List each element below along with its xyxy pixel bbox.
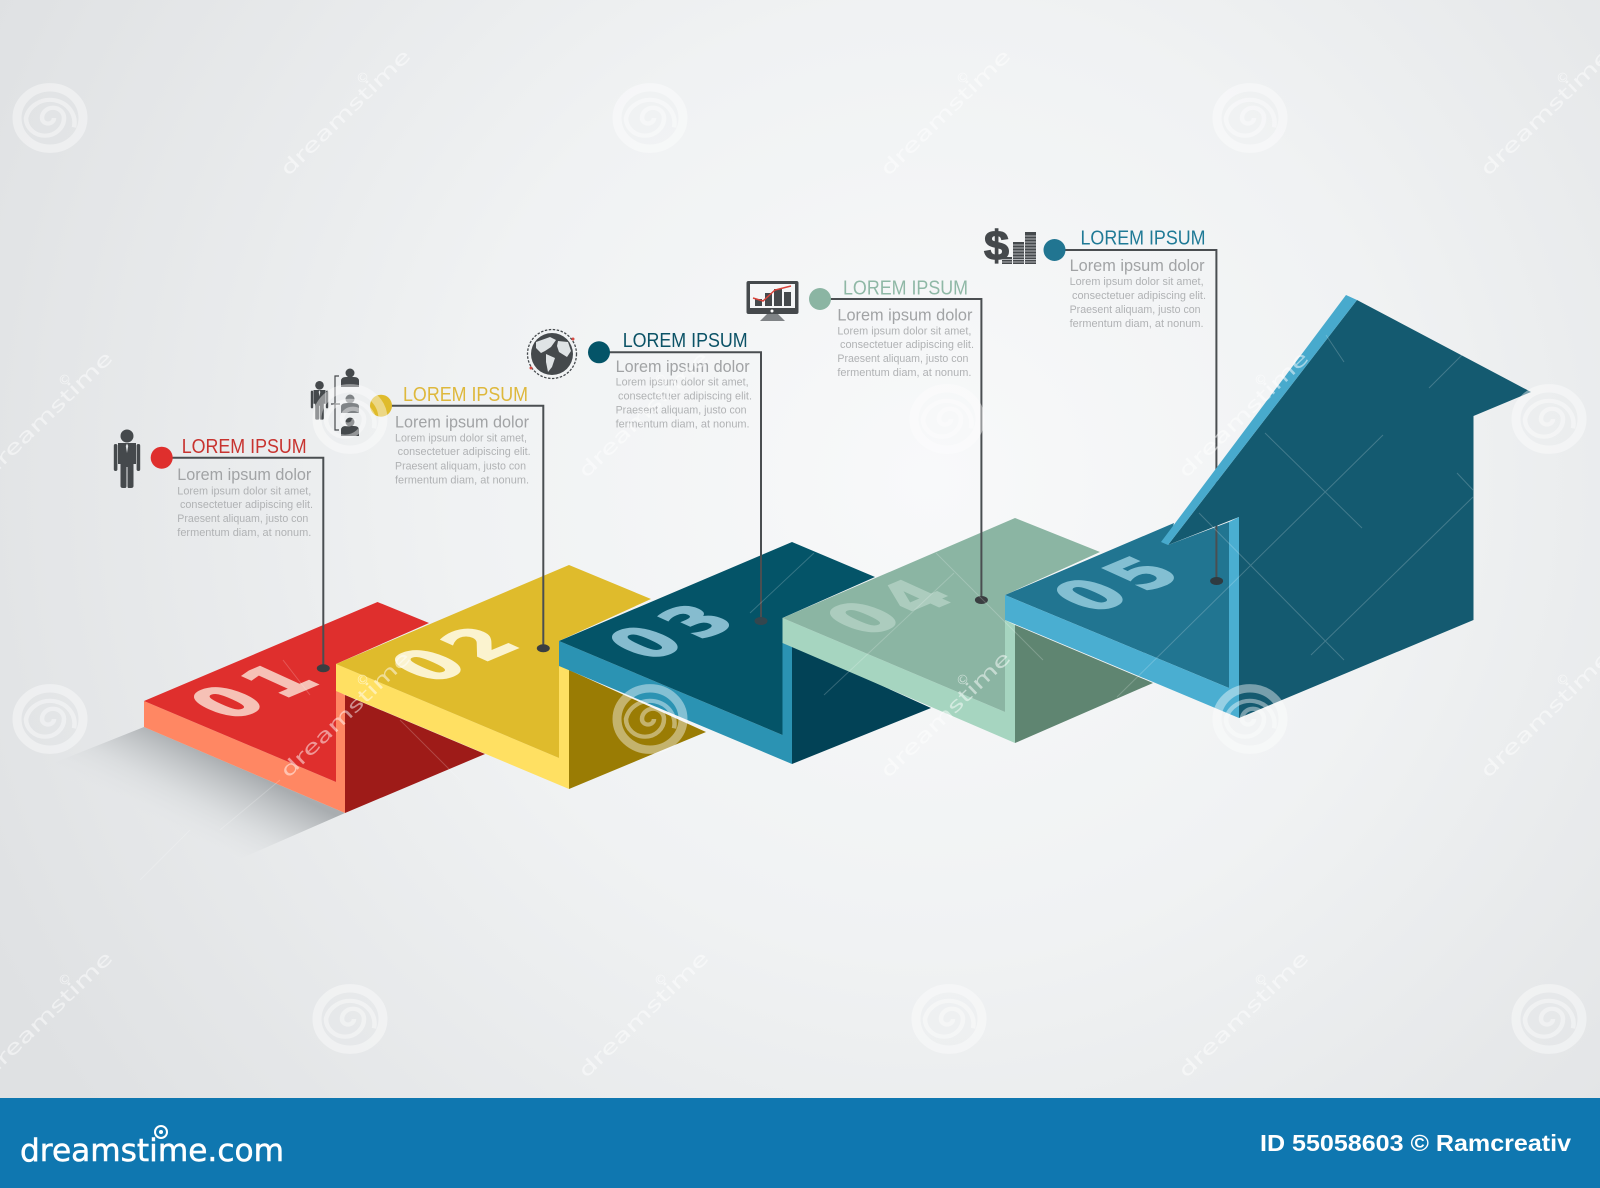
body 04 xyxy=(837,306,974,379)
body 03 xyxy=(616,357,752,430)
body 02: Lorem ipsum dolor sit amet, xyxy=(395,432,527,444)
body 01: Praesent aliquam, justo con xyxy=(177,513,308,525)
body 01: Lorem ipsum dolor sit amet, xyxy=(177,486,311,498)
watermark text: dreamstime xyxy=(1476,647,1600,782)
body 05: Praesent aliquam, justo con xyxy=(1070,304,1201,316)
watermark text: © xyxy=(1252,970,1271,990)
step 05 front face xyxy=(1005,517,1239,718)
icon: monitor with chart xyxy=(746,281,798,321)
big arrow xyxy=(1005,295,1531,718)
dot 03 xyxy=(588,341,610,363)
body 04: consectetuer adipiscing elit. xyxy=(840,339,974,351)
watermark text: dreamstime xyxy=(876,647,1015,782)
body 01: fermentum diam, at nonum. xyxy=(177,527,311,539)
footer logo: dreamstime.com xyxy=(20,1133,284,1169)
watermark text: © xyxy=(652,370,671,390)
body 02: Praesent aliquam, justo con xyxy=(395,460,526,472)
title 01: LOREM IPSUM xyxy=(182,435,307,458)
faint watermark cross lines xyxy=(140,335,1473,880)
icon: team hierarchy xyxy=(311,368,359,436)
body 05: fermentum diam, at nonum. xyxy=(1070,318,1204,330)
body 02: Lorem ipsum dolor xyxy=(395,412,529,431)
step 02 yellow xyxy=(336,565,706,789)
body 01 xyxy=(177,465,313,539)
item 02 xyxy=(370,383,531,486)
icon: dollar and bars xyxy=(984,222,1036,269)
body 03: fermentum diam, at nonum. xyxy=(616,418,750,430)
body 02: fermentum diam, at nonum. xyxy=(395,474,529,486)
leader line 05 xyxy=(1054,250,1223,585)
title 05: LOREM IPSUM xyxy=(1080,226,1206,249)
dot 01 xyxy=(151,447,173,469)
title 03: LOREM IPSUM xyxy=(623,329,748,352)
watermark text: © xyxy=(354,68,373,88)
icon: globe xyxy=(528,330,576,378)
watermark text: dreamstime xyxy=(876,45,1015,180)
step 04 sage xyxy=(782,518,1153,743)
body 03: consectetuer adipiscing elit. xyxy=(618,390,752,402)
body 05 xyxy=(1070,256,1206,330)
watermark text: © xyxy=(1252,370,1271,390)
arrow light edge xyxy=(1161,295,1357,545)
watermark text: © xyxy=(56,970,75,990)
item 05 xyxy=(1044,226,1206,330)
leader line 04 xyxy=(820,299,988,604)
title 02: LOREM IPSUM xyxy=(403,383,528,406)
body 04: Lorem ipsum dolor sit amet, xyxy=(837,326,971,338)
icon: businessman xyxy=(114,430,140,488)
dot 04 xyxy=(809,288,831,310)
body 02: consectetuer adipiscing elit. xyxy=(398,446,531,458)
icon: dollar and bars: $ xyxy=(984,222,1009,269)
watermark text: dreamstime xyxy=(1174,947,1313,1082)
body 01: consectetuer adipiscing elit. xyxy=(180,499,313,511)
body 03: Lorem ipsum dolor sit amet, xyxy=(616,376,749,388)
watermark spirals xyxy=(17,87,1582,1050)
watermark text: dreamstime xyxy=(276,45,415,180)
footer credit: ID 55058603 © Ramcreativ xyxy=(1260,1130,1571,1156)
drop shadow under first step xyxy=(36,727,345,858)
number 04: 04 xyxy=(805,566,985,644)
number 03: 03 xyxy=(587,590,767,669)
leader line 03 xyxy=(599,352,768,625)
dot 02 xyxy=(370,395,392,417)
watermark text: © xyxy=(652,970,671,990)
watermark text: © xyxy=(56,370,75,390)
watermark text: dreamstime xyxy=(276,647,415,782)
item 04 xyxy=(809,276,974,379)
watermark text: © xyxy=(1554,670,1573,690)
watermark text: © xyxy=(954,670,973,690)
body 05: consectetuer adipiscing elit. xyxy=(1072,290,1206,302)
body 01: Lorem ipsum dolor xyxy=(177,465,312,484)
body 03: Lorem ipsum dolor xyxy=(616,357,750,376)
body 04: Praesent aliquam, justo con xyxy=(837,353,968,365)
footer bar xyxy=(0,1098,1600,1188)
body 04: fermentum diam, at nonum. xyxy=(837,367,971,379)
leader line 01 xyxy=(162,458,330,672)
leader line 02 xyxy=(381,406,550,652)
body 05: Lorem ipsum dolor sit amet, xyxy=(1070,276,1204,288)
watermark text: © xyxy=(1554,68,1573,88)
number 01: 01 xyxy=(169,650,349,728)
number 05: 05 xyxy=(1032,543,1212,621)
step 03 dark blue xyxy=(559,542,931,764)
watermark text: dreamstime xyxy=(574,947,713,1082)
watermark text: dreamstime xyxy=(1174,347,1313,482)
watermark text: © xyxy=(954,68,973,88)
body 03: Praesent aliquam, justo con xyxy=(616,404,747,416)
body 04: Lorem ipsum dolor xyxy=(837,306,973,324)
body 02 xyxy=(395,412,531,486)
item 01 xyxy=(151,435,313,539)
watermark text: dreamstime xyxy=(574,347,713,482)
title 04: LOREM IPSUM xyxy=(843,276,968,299)
watermark text: dreamstime xyxy=(1476,45,1600,180)
step 01 red xyxy=(144,602,485,813)
number 02: 02 xyxy=(370,613,550,691)
item 03 xyxy=(588,329,752,430)
watermark text: © xyxy=(354,670,373,690)
step 05 top face xyxy=(1005,522,1229,688)
dot 05 xyxy=(1044,239,1066,261)
body 05: Lorem ipsum dolor xyxy=(1070,256,1205,275)
